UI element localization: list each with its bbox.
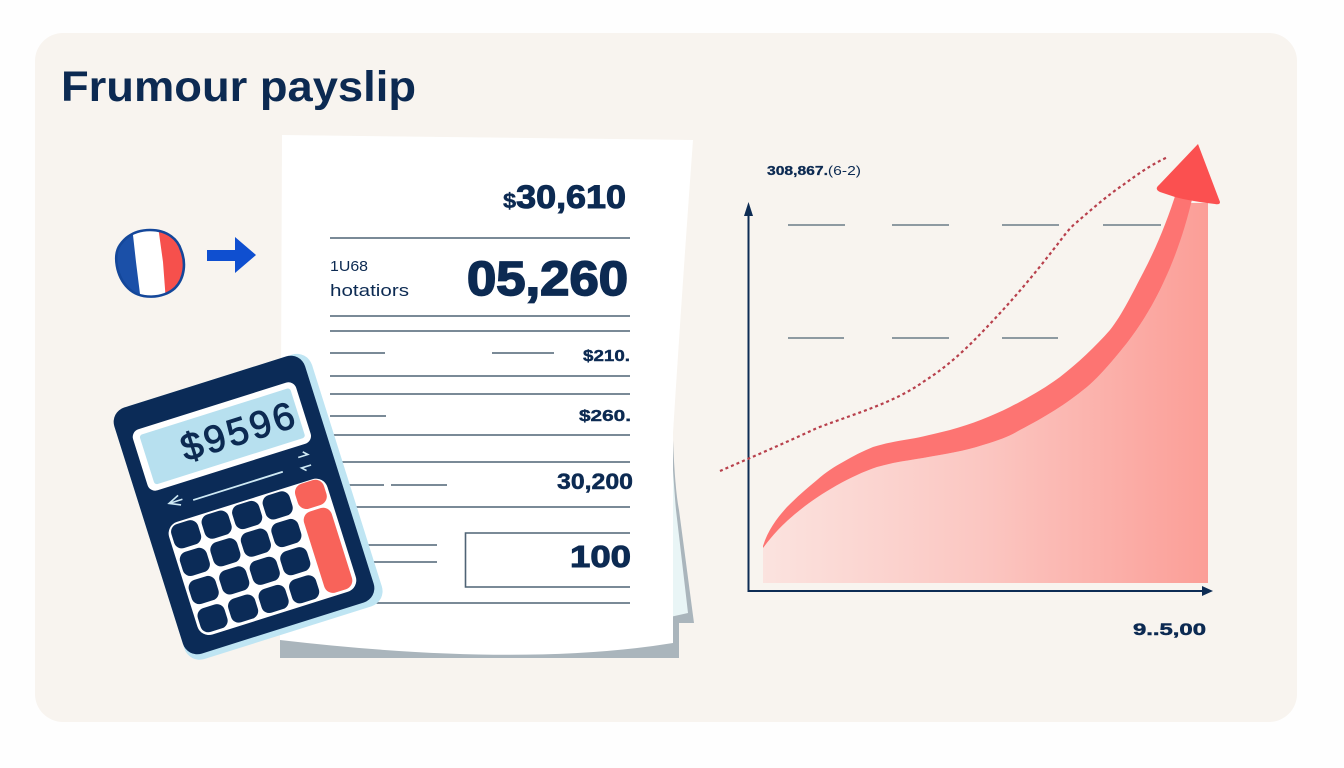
- x-axis label: 9..5,00: [1133, 620, 1206, 639]
- rising arrow head: [1157, 144, 1220, 204]
- title: Frumour payslip: [61, 63, 416, 111]
- amount: row 1: $210.: [583, 348, 630, 365]
- calculator body: [110, 352, 378, 658]
- keypad: [166, 476, 359, 638]
- amount: top: $30,610: [503, 179, 626, 215]
- back sheet shadow: [280, 440, 694, 658]
- calculator shadow: [110, 350, 387, 664]
- payslip rules: [330, 238, 630, 603]
- icon: France flag: [114, 228, 186, 298]
- area under curve: [763, 203, 1208, 583]
- display divider: [193, 472, 283, 500]
- dotted trend line: [720, 157, 1168, 471]
- chart: rising salary: [720, 144, 1220, 639]
- front sheet: [280, 135, 693, 655]
- label: hotatiors: hotatiors: [330, 281, 409, 300]
- icon: calculator: [110, 350, 387, 664]
- icon: left arrow glyph: [168, 494, 184, 508]
- y-axis label: 308,867. (6-2): [767, 163, 861, 178]
- gridline dashes: [788, 225, 1161, 338]
- back sheet: [670, 470, 688, 617]
- amount: row 3: 30,200: [557, 469, 633, 494]
- label: code: 1U68: [330, 258, 368, 275]
- icon: swap glyph: [297, 451, 312, 472]
- display frame: [131, 380, 313, 493]
- display value: $9596: [176, 395, 300, 470]
- rising arrow body: [763, 190, 1193, 548]
- panel: payslip document: [280, 135, 694, 658]
- amount: main: 05,260: [467, 253, 628, 306]
- display screen: [139, 388, 306, 485]
- arrow: flag to payslip: [207, 237, 256, 273]
- axes: [744, 202, 1213, 596]
- amount: boxed total: 100: [570, 539, 631, 574]
- amount: row 2: $260.: [579, 408, 631, 425]
